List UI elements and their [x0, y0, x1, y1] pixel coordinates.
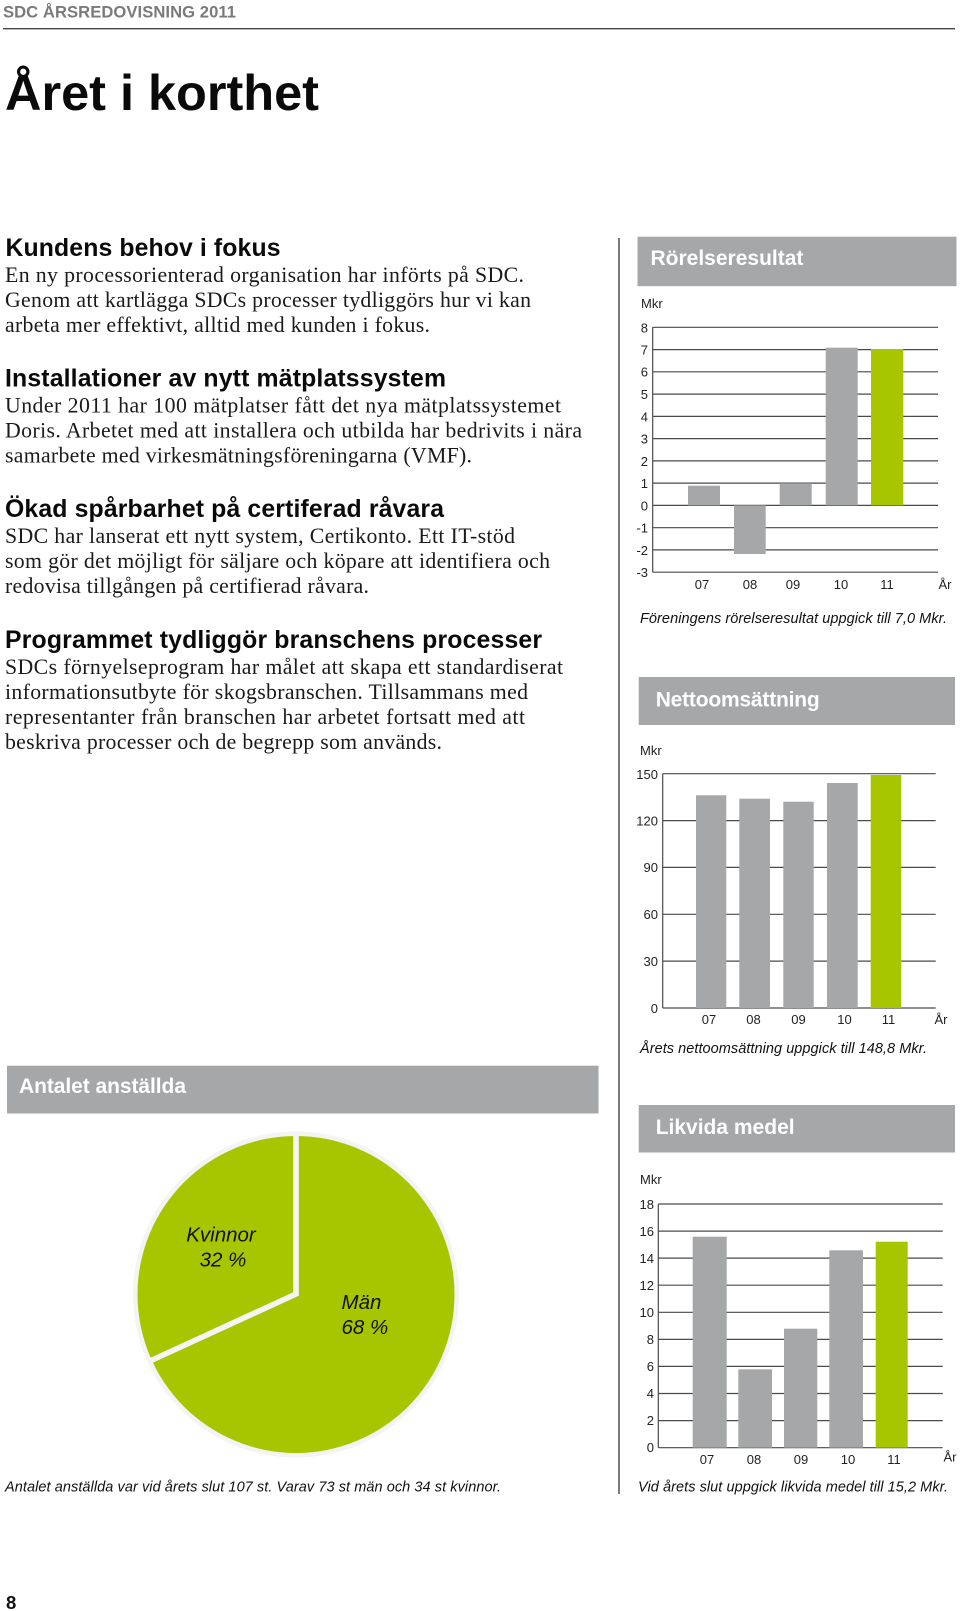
text block: Kundens behov i fokus [5, 235, 531, 337]
bar chart: Nettoomsättning: 30 [644, 954, 658, 969]
panel: Nettoomsättning [636, 677, 955, 1057]
bar chart: Nettoomsättning: Mkr [640, 743, 662, 758]
bar chart: Likvida medel: Mkr [640, 1172, 662, 1187]
pie chart: Män 68 %, Kvinnor 32 % [133, 1132, 459, 1458]
text block: Ökad spårbarhet på certiferad råvara [5, 496, 550, 598]
bar chart: Nettoomsättning: 120 [636, 814, 658, 828]
bar chart: Rörelseresultat: -2 [636, 543, 648, 558]
bar chart: Rörelseresultat: År [938, 577, 952, 592]
bar chart: Rörelseresultat: 2 [641, 454, 648, 469]
bar chart: Nettoomsättning: 90 [644, 860, 658, 875]
bar chart: Nettoomsättning: 07 [702, 1012, 716, 1027]
caption: Antalet anställda var vid årets slut 107 st. Varav 73 st män och 34 st kvinnor. [4, 1480, 501, 1496]
bar chart: Rörelseresultat: 7 [641, 342, 648, 358]
heading: Nettoomsättning [639, 677, 955, 725]
bar chart: Likvida medel: 14 [640, 1251, 654, 1266]
pie chart: Män 68 %, Kvinnor 32 %: Kvinnor [186, 1224, 257, 1247]
bar chart: Likvida medel: 4 [647, 1386, 654, 1401]
bar chart: Rörelseresultat: 1 [641, 476, 648, 491]
bar chart: Rörelseresultat: -3 [636, 565, 648, 580]
bar chart: Likvida medel: År [944, 1450, 957, 1465]
bar chart: Nettoomsättning: 10 [837, 1012, 852, 1027]
bar chart: Rörelseresultat: 0 [641, 498, 648, 514]
bar chart: Rörelseresultat: 10 [834, 577, 848, 592]
bar chart: Nettoomsättning: 0 [651, 1001, 658, 1016]
bar chart: Nettoomsättning [636, 743, 948, 1027]
bar chart: Rörelseresultat: 4 [641, 410, 648, 424]
heading: Likvida medel: Likvida medel [656, 1116, 795, 1139]
heading: Rörelseresultat [638, 237, 956, 286]
bar chart: Likvida medel: 10 [841, 1452, 855, 1467]
text block: Programmet tydliggör branschens processer: SDCs förnyelseprogram har målet att skapa ett standardiserat [5, 655, 563, 679]
heading: Nettoomsättning: Nettoomsättning [656, 689, 820, 712]
bar chart: Nettoomsättning: 09 [791, 1012, 806, 1027]
heading: Antalet anställda [7, 1066, 598, 1114]
pie chart: Män 68 %, Kvinnor 32 %: Män [342, 1291, 381, 1314]
bar chart: Nettoomsättning: 08 [746, 1012, 761, 1027]
text block: Kundens behov i fokus: arbeta mer effektivt, alltid med kunden i fokus. [5, 313, 430, 337]
text block: Installationer av nytt mätplatssystem: Doris. Arbetet med att installera och utbilda har bedrivits i nära [5, 419, 582, 443]
text block: Installationer av nytt mätplatssystem [5, 366, 582, 468]
bar chart: Rörelseresultat: 11 [880, 577, 894, 592]
bar chart: Nettoomsättning: 60 [644, 907, 658, 922]
bar chart: Rörelseresultat: 08 [743, 577, 757, 592]
text block: Ökad spårbarhet på certiferad råvara: Ökad spårbarhet på certiferad råvara [5, 496, 444, 523]
text block: Programmet tydliggör branschens processer: representanter från branschen har arbetet fortsatt med att [5, 705, 525, 729]
bar chart: Rörelseresultat: 07 [695, 577, 709, 592]
panel: Rörelseresultat [636, 237, 956, 627]
bar chart: Likvida medel: 11 [887, 1452, 901, 1467]
bar chart: Likvida medel: 18 [640, 1197, 654, 1212]
text block: Programmet tydliggör branschens processer: beskriva processer och de begrepp som används. [5, 730, 442, 754]
text block: Installationer av nytt mätplatssystem: samarbete med virkesmätningsföreningarna (VMF). [5, 444, 472, 468]
bar chart: Likvida medel: 0 [647, 1440, 654, 1455]
running header: SDC ÅRSREDOVISNING 2011 [3, 2, 236, 22]
column divider [618, 238, 620, 1494]
caption: Föreningens rörelseresultat uppgick till 7,0 Mkr. [640, 611, 947, 627]
text block: Kundens behov i fokus: Genom att kartlägga SDCs processer tydliggörs hur vi kan [5, 288, 531, 312]
bar chart: Likvida medel: 12 [640, 1278, 654, 1293]
bar chart: Likvida medel: 09 [794, 1452, 808, 1467]
bar chart: Rörelseresultat: 8 [641, 320, 648, 336]
caption: Årets nettoomsättning uppgick till 148,8 Mkr. [639, 1040, 927, 1057]
bar chart: Rörelseresultat: 3 [641, 432, 648, 446]
caption: Vid årets slut uppgick likvida medel till 15,2 Mkr. [638, 1480, 948, 1496]
heading: Antalet anställda: Antalet anställda [19, 1075, 186, 1098]
panel: Antalet anställda [4, 1066, 598, 1496]
bar chart: Rörelseresultat: -1 [636, 520, 648, 536]
bar chart: Rörelseresultat: 5 [641, 387, 648, 402]
bar chart: Likvida medel: 08 [747, 1452, 761, 1467]
pie chart: Män 68 %, Kvinnor 32 %: 32 % [200, 1249, 246, 1272]
bar chart: Likvida medel: 10 [640, 1305, 654, 1320]
bar chart: Nettoomsättning: 11 [882, 1012, 895, 1027]
text block: Programmet tydliggör branschens processer: informationsutbyte för skogsbranschen. Tillsammans med [5, 680, 528, 704]
bar chart: Likvida medel: 8 [647, 1332, 654, 1347]
panel: Likvida medel [638, 1105, 957, 1496]
bar chart: Nettoomsättning: År [934, 1012, 948, 1027]
bar chart: Nettoomsättning: 150 [636, 767, 658, 782]
heading: Likvida medel [639, 1105, 955, 1152]
bar chart: Rörelseresultat: 09 [786, 577, 800, 592]
pie chart: Män 68 %, Kvinnor 32 %: 68 % [342, 1316, 388, 1339]
bar chart: Rörelseresultat: Mkr [641, 296, 663, 311]
text block: Ökad spårbarhet på certiferad råvara: SDC har lanserat ett nytt system, Certikonto. Ett IT-stöd [5, 524, 515, 548]
text block: Installationer av nytt mätplatssystem: Installationer av nytt mätplatssystem [5, 366, 446, 393]
text block: Programmet tydliggör branschens processer: Programmet tydliggör branschens processer [5, 627, 542, 654]
bar chart: Likvida medel: 6 [647, 1359, 654, 1374]
text block: Ökad spårbarhet på certiferad råvara: redovisa tillgången på certifierad råvara. [5, 574, 369, 598]
bar chart: Rörelseresultat: 6 [641, 364, 648, 380]
text block: Kundens behov i fokus: Kundens behov i fokus [6, 235, 280, 262]
heading: Rörelseresultat: Rörelseresultat [650, 247, 803, 270]
text block: Kundens behov i fokus: En ny processorienterad organisation har införts på SDC. [5, 263, 524, 287]
text block: Programmet tydliggör branschens processer [5, 627, 563, 754]
text block: Ökad spårbarhet på certiferad råvara: som gör det möjligt för säljare och köpare att identifiera och [5, 549, 550, 573]
title: Året i korthet [5, 64, 319, 121]
bar chart: Likvida medel [640, 1172, 957, 1467]
bar chart: Likvida medel: 2 [647, 1413, 654, 1428]
bar chart: Likvida medel: 07 [700, 1452, 714, 1467]
bar chart: Likvida medel: 16 [640, 1224, 654, 1239]
bar chart: Rörelseresultat [636, 296, 952, 592]
text block: Installationer av nytt mätplatssystem: Under 2011 har 100 mätplatser fått det nya mätplatssystemet [5, 394, 561, 418]
